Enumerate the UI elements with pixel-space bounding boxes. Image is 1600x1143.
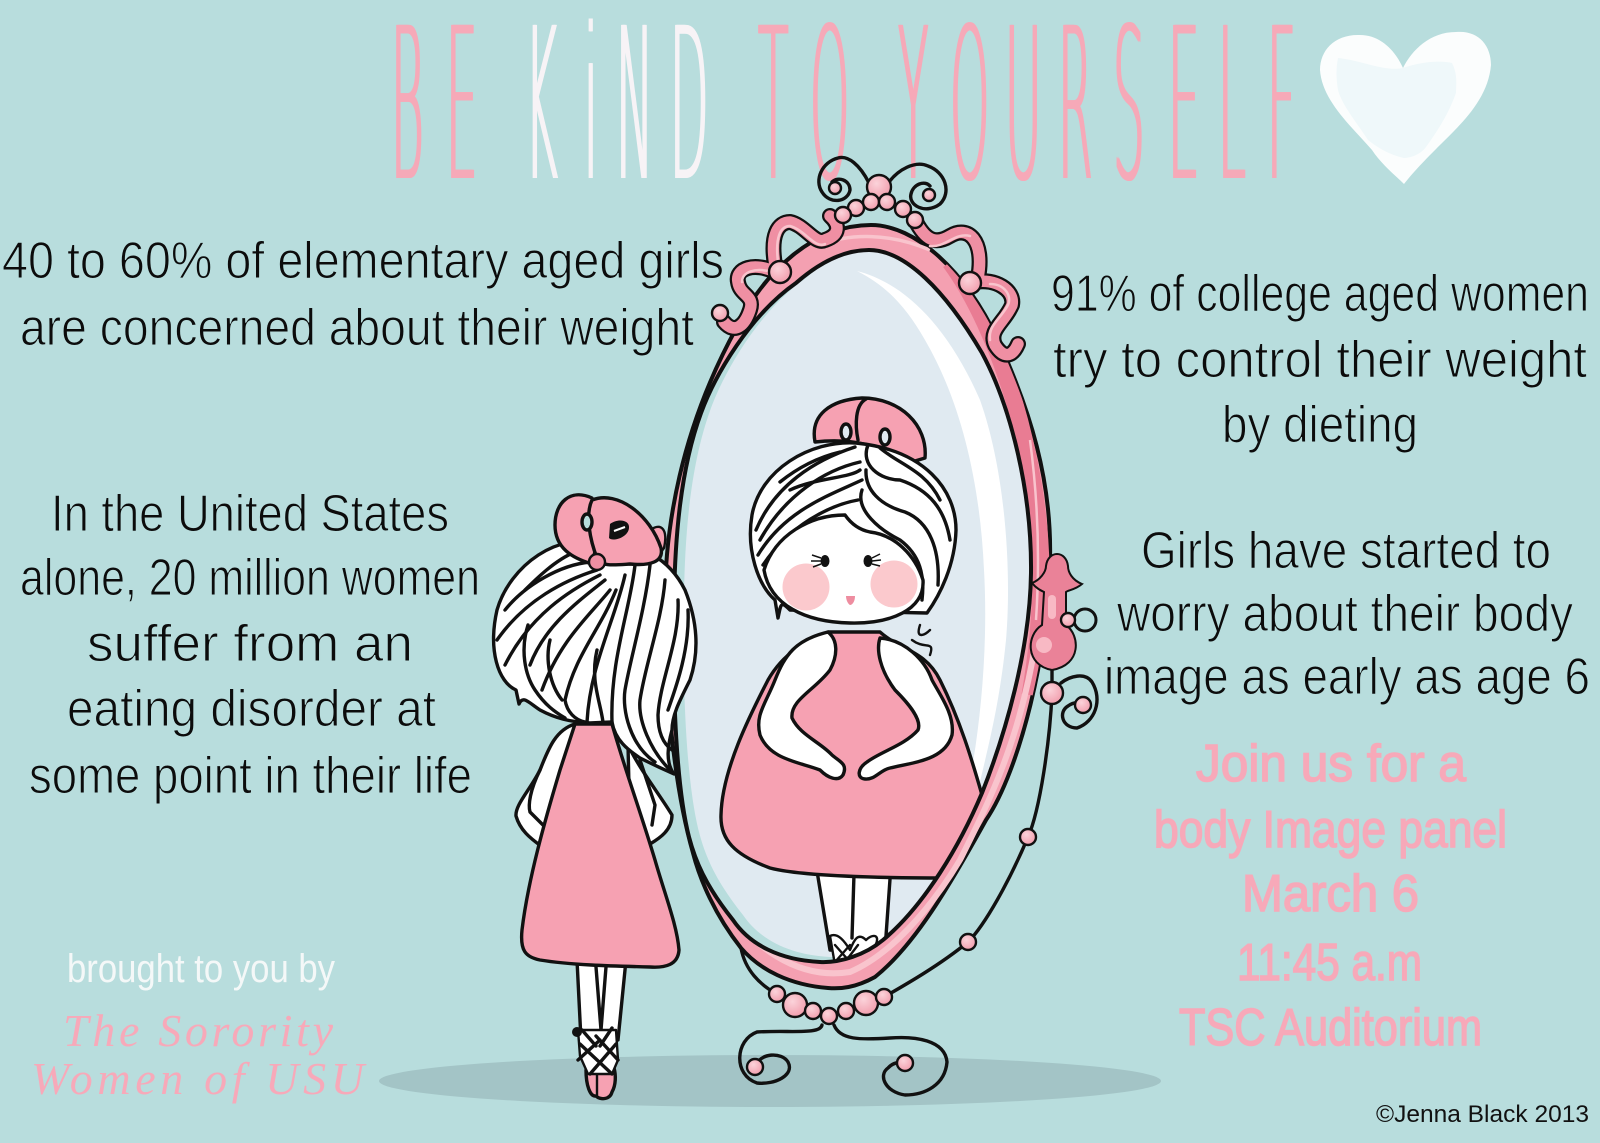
mirror — [665, 225, 1050, 988]
title — [391, 0, 1296, 228]
beads — [747, 682, 1091, 1075]
event details: March 6 — [1242, 865, 1419, 923]
curls — [819, 157, 946, 209]
reflected eyes — [811, 554, 881, 567]
statistic: elementary aged girls: are concerned about their weight — [20, 299, 694, 357]
credit: brought to you by: The Sorority — [63, 1005, 334, 1056]
credit: brought to you by: brought to you by — [67, 947, 335, 991]
girl seen from behind — [494, 495, 696, 1099]
ribbons — [724, 216, 1018, 355]
mirror frame — [665, 225, 1050, 988]
hair strands — [497, 552, 688, 770]
mirror glass — [674, 250, 1031, 962]
reflected arms — [759, 632, 845, 779]
reflected dress — [721, 632, 982, 878]
copyright: ©Jenna Black 2013 — [1376, 1101, 1589, 1128]
statistic: 20 million women: suffer from an — [87, 615, 413, 673]
event details: 11:45 a.m — [1237, 934, 1422, 992]
hair — [494, 541, 696, 774]
statistic: 20 million women — [20, 485, 480, 805]
reflected hair lock — [912, 625, 931, 655]
dress — [522, 724, 679, 967]
icon: white heart — [1320, 32, 1491, 184]
statistic: 20 million women: eating disorder at — [67, 680, 437, 738]
mirror highlight — [857, 271, 1008, 790]
event details — [1154, 735, 1507, 1057]
event details: Join us for a — [1196, 735, 1466, 793]
reflected hair — [750, 443, 956, 618]
pointe shoes — [572, 1027, 618, 1099]
event details: TSC Auditorium — [1179, 999, 1482, 1057]
mirror lamp ornament — [1031, 554, 1096, 670]
mirror glass outline — [674, 250, 1031, 962]
credit: brought to you by: Women of USU — [31, 1053, 367, 1104]
reflected cheeks — [782, 560, 918, 610]
statistic: elementary aged girls — [2, 232, 724, 357]
reflected bow — [814, 398, 925, 464]
credit: brought to you by — [31, 947, 367, 1104]
event details: body Image panel — [1154, 801, 1507, 859]
statistic: elementary aged girls: 40 to 60% of elementary aged girls — [2, 232, 724, 290]
reflected shoes — [830, 935, 877, 965]
bow — [555, 495, 661, 570]
statistic: body image at age 6 — [1104, 522, 1590, 706]
mirror frame ornaments — [712, 157, 1018, 355]
statistic: college aged women: by dieting — [1222, 396, 1418, 454]
pearls — [712, 175, 981, 321]
bow tail behind mirror — [650, 527, 665, 560]
statistic: 20 million women: alone, 20 million women — [20, 549, 480, 607]
arms — [516, 724, 590, 850]
reflected girl — [721, 398, 982, 965]
reflected mouth — [846, 596, 855, 605]
statistic: 20 million women: In the United States — [51, 485, 449, 543]
statistic: college aged women — [1051, 265, 1589, 454]
floor shadow — [379, 1055, 1161, 1107]
statistic: body image at age 6: Girls have started to — [1141, 522, 1551, 580]
frame shading — [756, 234, 1050, 976]
reflected face — [764, 515, 923, 623]
reflected legs — [816, 865, 891, 950]
statistic: 20 million women: some point in their life — [29, 747, 472, 805]
mirror stand chain and curls — [740, 668, 1097, 1095]
legs — [577, 960, 626, 1040]
